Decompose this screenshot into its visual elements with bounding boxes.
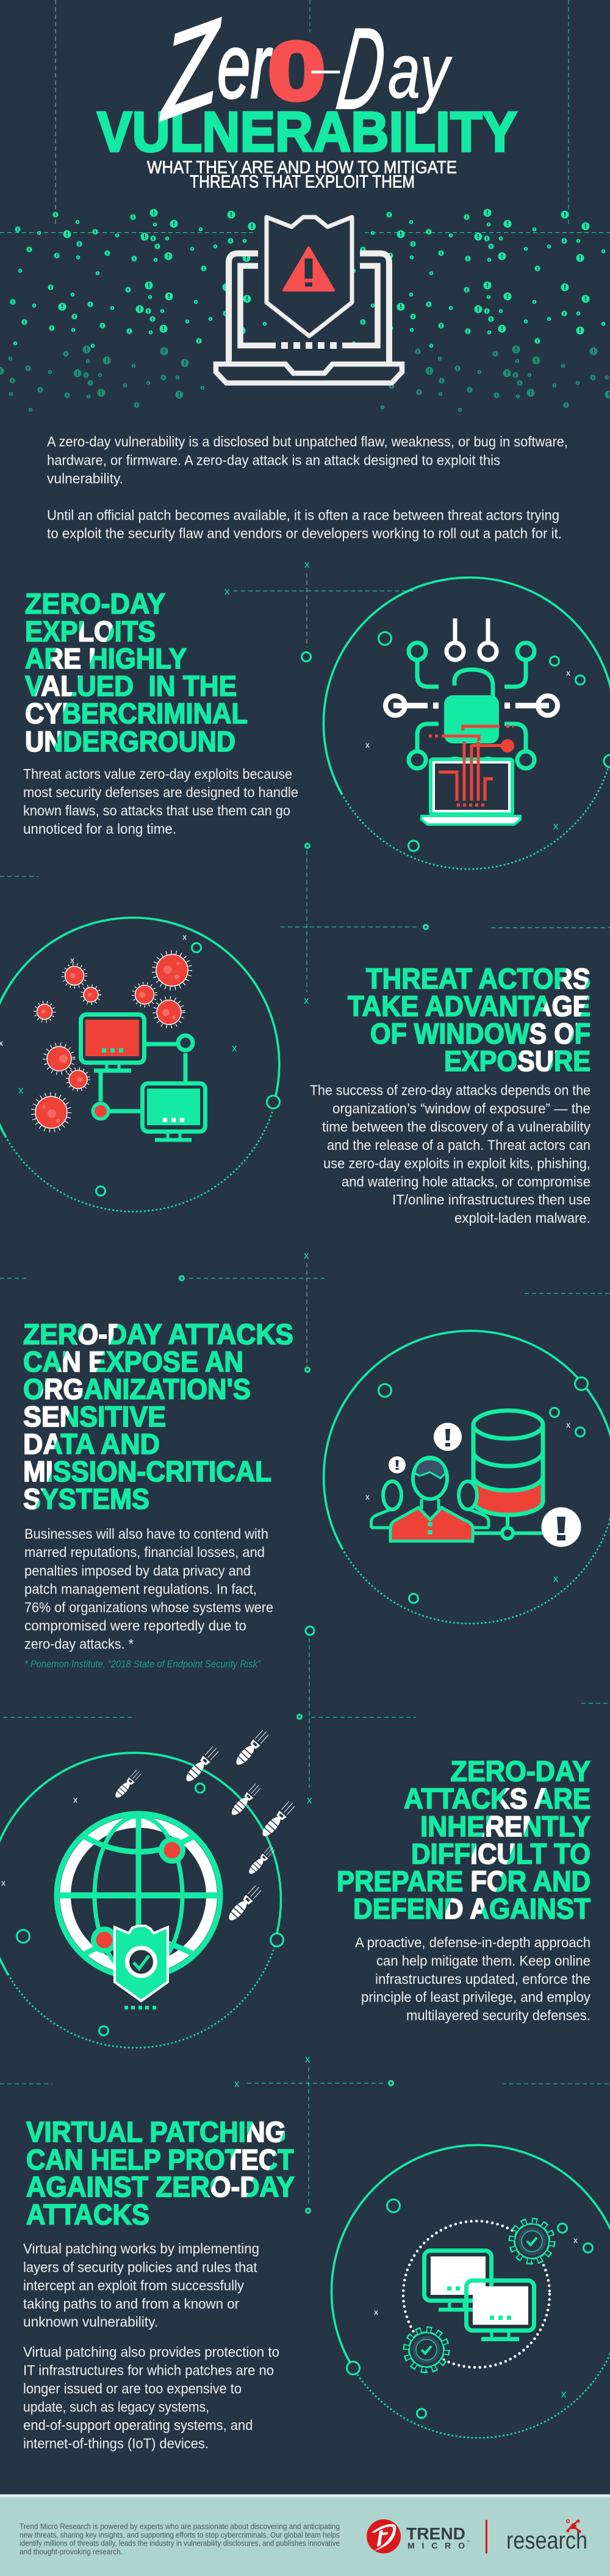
body: virtual patching: intercept an exploit from successfully (23, 2277, 244, 2293)
section 1 guide lines: x (304, 559, 310, 570)
heading: zero-day exploits: ARE HIGHLY (25, 642, 187, 674)
body: zero-day exploits: Threat actors value zero-day exploits because (23, 766, 292, 782)
section 1 guide lines (224, 559, 416, 661)
title: Zero-Day: D (331, 5, 393, 134)
icon: incoming missiles (113, 1728, 296, 1923)
body: virtual patching: longer issued or are too expensive to (23, 2381, 242, 2397)
header guide lines (0, 0, 610, 233)
heading: expose sensitive data: ZERO-DAY ATTACKS (23, 1318, 293, 1350)
heading: zero-day exploits: ZERO-DAY (25, 587, 165, 620)
circle frame 1 (323, 578, 610, 869)
intro text: to exploit the security flaw and vendors or developers working to roll out a patch for it. (47, 526, 562, 542)
circle frame 4: x (1, 1878, 5, 1887)
icon: database and people with alerts (371, 1411, 581, 1547)
body: virtual patching: end-of-support operating systems, and (23, 2417, 253, 2433)
body: difficult to prepare: infrastructures updated, enforce the (375, 1971, 590, 1987)
section 5 guide lines (0, 2053, 610, 2213)
icon: globe with shield (54, 1814, 223, 2009)
heading: windows of exposure: OF WINDOWS OF (370, 1017, 590, 1050)
body: virtual patching (23, 2241, 279, 2452)
body: windows of exposure: time between the discovery of a vulnerability (322, 1118, 590, 1134)
circle frame 2 (0, 918, 280, 1212)
body: difficult to prepare (355, 1934, 590, 2023)
heading: difficult to prepare (337, 1755, 590, 1925)
circle frame 4: x (73, 1795, 77, 1805)
section 2 guide lines: x (304, 995, 309, 1006)
circle frame 3 (324, 1331, 610, 1623)
heading: difficult to prepare: PREPARE FOR AND (337, 1865, 590, 1897)
body: expose sensitive data: penalties imposed by data privacy and (24, 1562, 251, 1578)
logo: Trend Micro: TREND (406, 2524, 465, 2543)
heading: expose sensitive data: CAN EXPOSE AN (23, 1345, 243, 1378)
heading: zero-day exploits: UNDERGROUND (25, 725, 235, 757)
body: virtual patching: IT infrastructures for which patches are no (23, 2363, 274, 2378)
body: virtual patching: Virtual patching also provides protection to (23, 2344, 279, 2360)
circle frame 1: x (365, 740, 370, 750)
intro text: hardware, or firmware. A zero-day attack is an attack designed to exploit this (47, 453, 500, 468)
subtitle: THREATS THAT EXPLOIT THEM (190, 172, 415, 191)
heading: windows of exposure: THREAT ACTORS (366, 962, 590, 995)
heading: virtual patching: AGAINST ZERO-DAY (26, 2170, 295, 2203)
footer band (0, 2494, 610, 2576)
circle frame 3: x (566, 1420, 570, 1429)
body: windows of exposure (310, 1082, 590, 1226)
heading: windows of exposure (348, 962, 590, 1077)
body: expose sensitive data (24, 1526, 273, 1651)
body: expose sensitive data: zero-day attacks. * (24, 1636, 134, 1651)
heading: difficult to prepare: DEFEND AGAINST (353, 1892, 590, 1925)
body: difficult to prepare: A proactive, defense-in-depth approach (355, 1934, 590, 1950)
heading: expose sensitive data: SENSITIVE (23, 1400, 166, 1433)
body: expose sensitive data: patch management regulations. In fact, (24, 1581, 257, 1597)
title: Zero-Day: - (306, 49, 345, 90)
circle frame 5: x (374, 2307, 378, 2317)
section 3 guide lines: x (304, 1250, 309, 1261)
body: windows of exposure: and watering hole attacks, or compromise (342, 1173, 590, 1189)
heading: expose sensitive data (23, 1318, 293, 1515)
body: expose sensitive data: marred reputations, financial losses, and (24, 1544, 265, 1560)
footer text: and thought-provoking research. (20, 2548, 123, 2556)
intro text: vulnerability. (47, 471, 123, 487)
intro text: A zero-day vulnerability is a disclosed but unpatched flaw, weakness, or bug in software, (47, 434, 568, 449)
intro text (47, 434, 568, 542)
heading: zero-day exploits (25, 587, 248, 757)
body: zero-day exploits: unnoticed for a long time. (23, 821, 176, 837)
heading: difficult to prepare: ATTACKS ARE (404, 1782, 590, 1815)
heading: expose sensitive data: DATA AND (23, 1428, 160, 1460)
heading: difficult to prepare: DIFFICULT TO (411, 1837, 590, 1870)
circle frame 2: x (70, 955, 74, 965)
body: expose sensitive data: Businesses will also have to contend with (24, 1526, 268, 1542)
heading: virtual patching: CAN HELP PROTECT (26, 2143, 294, 2176)
title: Zero-Day: 0 (268, 25, 326, 117)
body: difficult to prepare: multilayered security defenses. (406, 2008, 590, 2023)
body: virtual patching: update, such as legacy systems, (23, 2399, 209, 2415)
section 3 guide lines (0, 1250, 610, 1372)
body: zero-day exploits: most security defenses are designed to handle (23, 784, 298, 800)
section 4 guide lines: x (307, 1794, 312, 1806)
circle frame 1: x (566, 668, 570, 678)
icon: padlock circuit with laptop (386, 618, 558, 825)
body: virtual patching: Virtual patching works by implementing (23, 2241, 259, 2256)
heading: windows of exposure: TAKE ADVANTAGE (348, 990, 590, 1022)
icon: laptop with warning shield (216, 217, 402, 383)
section 1 guide lines: x (224, 585, 230, 597)
section 4 guide lines (3, 1626, 610, 1806)
circle frame 1: x (553, 820, 559, 832)
heading: expose sensitive data: SYSTEMS (23, 1483, 149, 1515)
heading: virtual patching: ATTACKS (26, 2198, 149, 2231)
body: windows of exposure: use zero-day exploits in exploit kits, phishing, (323, 1155, 590, 1171)
intro text: Until an official patch becomes available, it is often a race between threat actors trying (47, 507, 559, 523)
logo: Trend Micro: TM (466, 2539, 470, 2542)
title: Zero-Day: ay (388, 29, 453, 114)
circle frame 3: x (365, 1492, 370, 1501)
title: VULNERABILITY: VULNERABILITY (97, 100, 517, 163)
heading: expose sensitive data: MISSION-CRITICAL (23, 1455, 271, 1487)
body: virtual patching: layers of security policies and rules that (23, 2259, 257, 2275)
heading: virtual patching (26, 2116, 295, 2231)
circle frame 5: x (573, 2235, 578, 2245)
logo: Trend Micro: MICRO (407, 2541, 465, 2550)
subtitle (147, 158, 457, 191)
body: windows of exposure: The success of zero-day attacks depends on the (310, 1082, 590, 1098)
body: virtual patching: taking paths to and from a known or (23, 2295, 239, 2311)
body: virtual patching: unknown vulnerability. (23, 2314, 158, 2330)
body: windows of exposure: exploit-laden malware. (454, 1210, 590, 1226)
circle frame 2: x (232, 1042, 237, 1054)
circle frame 4 (0, 1753, 284, 2048)
body: zero-day exploits: known flaws, so attacks that use them can go (23, 803, 290, 818)
section 5 guide lines: x (234, 2078, 240, 2089)
logo: Trend Micro (367, 2519, 470, 2553)
divider (486, 2520, 487, 2553)
circle frame 5: x (561, 2388, 567, 2400)
heading: zero-day exploits: EXPLOITS (25, 615, 156, 648)
footer text: new threats, sharing key insights, and supporting efforts to stop cybercriminals. Our global team helps (20, 2531, 340, 2539)
body: virtual patching: internet-of-things (IoT) devices. (23, 2436, 209, 2452)
body: windows of exposure: IT/online infrastructures then use (392, 1192, 590, 1208)
circle frame 3: x (553, 1573, 559, 1584)
exclamation dots field (0, 209, 610, 412)
body: difficult to prepare: principle of least privilege, and employ (361, 1989, 590, 2005)
title: Zero-Day: er (217, 15, 273, 117)
heading: windows of exposure: EXPOSURE (444, 1045, 590, 1077)
footer text: identify millions of threats daily, leads the industry in vulnerability disclosures, and publishes innovative (20, 2539, 340, 2548)
body: windows of exposure: organization’s “window of exposure” — the (332, 1100, 590, 1116)
circle frame 2: x (18, 1084, 24, 1096)
logo: research (506, 2520, 587, 2554)
icon: virtual patching monitors and gears (403, 2221, 552, 2370)
body: expose sensitive data: compromised were reportedly due to (24, 1617, 246, 1633)
section 2 guide lines (0, 844, 610, 1006)
heading: zero-day exploits: VALUED IN THE (25, 670, 237, 702)
icon: infected and clean monitors network (81, 1015, 205, 1142)
body: expose sensitive data: 76% of organizations whose systems were (24, 1599, 273, 1615)
footnote: * Ponemon Institute, “2018 State of Endpoint Security Risk” (24, 1659, 261, 1670)
body: windows of exposure: and the release of a patch. Threat actors can (327, 1137, 590, 1153)
heading: difficult to prepare: INHERENTLY (420, 1810, 590, 1842)
title: Zero-Day (160, 0, 453, 145)
heading: difficult to prepare: ZERO-DAY (450, 1755, 590, 1787)
heading: zero-day exploits: CYBERCRIMINAL (25, 697, 248, 729)
subtitle: WHAT THEY ARE AND HOW TO MITIGATE (147, 158, 457, 177)
circle frame 2: x (182, 932, 187, 942)
heading: virtual patching: VIRTUAL PATCHING (26, 2116, 286, 2148)
body: difficult to prepare: can help mitigate them. Keep online (376, 1953, 590, 1969)
logo: research: research (506, 2527, 587, 2554)
body: zero-day exploits (23, 766, 298, 837)
heading: expose sensitive data: ORGANIZATION'S (23, 1373, 251, 1405)
footer text (20, 2522, 340, 2556)
circle frame 5 (332, 2145, 610, 2438)
icon: malware viruses (33, 952, 190, 1131)
footer text: Trend Micro Research is powered by experts who are passionate about discovering and anticipating (20, 2522, 340, 2531)
section 5 guide lines: x (305, 2053, 310, 2065)
